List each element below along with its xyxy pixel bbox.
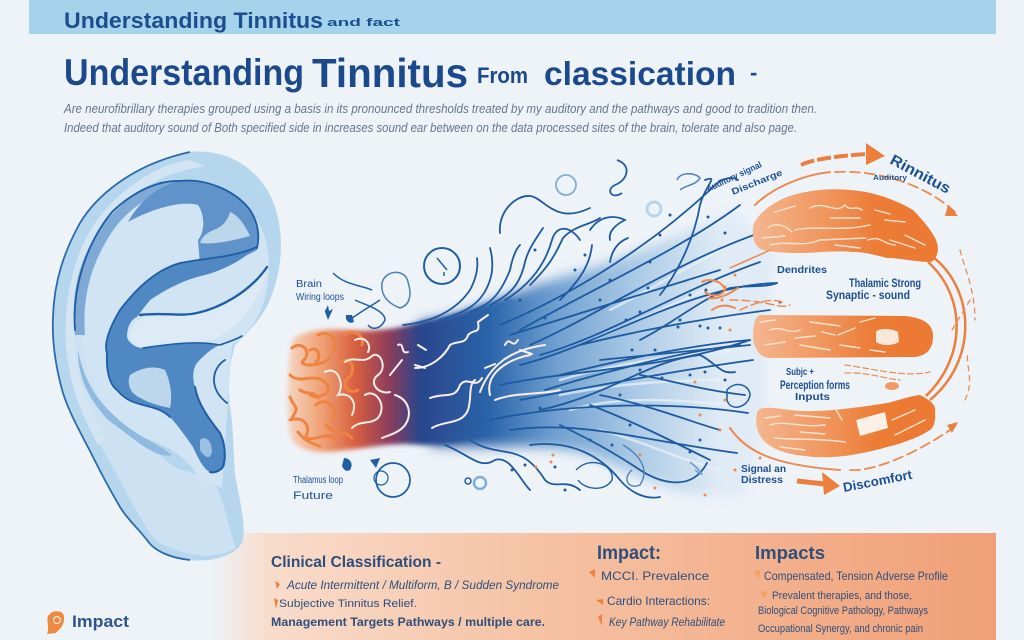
arrows below blob xyxy=(342,458,380,471)
header band xyxy=(29,0,996,34)
brain diagram labels: Inputs xyxy=(795,392,831,403)
title: classication xyxy=(544,55,736,92)
panel: impacts column: Compensated, Tension Adverse Profile xyxy=(764,569,948,583)
concha light patch xyxy=(129,368,171,408)
brain diagram labels: Discharge xyxy=(730,167,784,197)
bottom information band xyxy=(212,533,996,640)
neural strands xyxy=(403,178,797,498)
label: upper left of blob: Wiring loops xyxy=(296,292,344,303)
top orange arrow xyxy=(801,143,885,165)
panel: impacts column: Prevalent therapies, and those, xyxy=(772,590,912,602)
orange lobe: middle xyxy=(753,315,933,358)
brain diagram labels: Dendrites xyxy=(777,265,827,276)
panel: clinical classification xyxy=(271,554,559,629)
antihelix light area xyxy=(82,183,269,488)
brain diagram labels: Subjc + xyxy=(786,367,814,378)
title xyxy=(64,50,757,96)
brain diagram labels: Auditory signal xyxy=(705,159,763,194)
ear silhouette xyxy=(53,152,281,561)
impact heading: Impact: xyxy=(597,543,661,564)
title: - xyxy=(750,60,757,85)
intro paragraph xyxy=(63,102,817,135)
panel: impacts column: Occupational Synergy, and chronic pain xyxy=(758,623,923,635)
label: lower left of blob xyxy=(293,475,343,502)
brain diagram labels: Perception forms xyxy=(780,380,850,392)
panel: impact column: Key Pathway Rehabilitate xyxy=(609,615,725,629)
brain diagram labels: Thalamic Strong xyxy=(849,276,921,290)
central brain blob xyxy=(287,298,550,452)
brain diagram labels: Synaptic - sound xyxy=(826,288,910,302)
label: lower left of blob: Thalamus loop xyxy=(293,475,343,486)
brain diagram labels: Discomfort xyxy=(842,467,914,495)
arrows above blob xyxy=(324,305,354,323)
ear illustration xyxy=(53,152,281,561)
upper concha crescent xyxy=(128,181,259,265)
title: Tinnitus xyxy=(312,50,468,96)
anti-tragus shade strokes xyxy=(78,350,172,456)
header band title: Understanding Tinnitus xyxy=(64,8,323,33)
orange dashed arcs xyxy=(730,172,975,470)
label: upper left of blob: Brain xyxy=(296,279,322,290)
ear outline xyxy=(53,152,190,560)
circular doodles xyxy=(333,160,750,497)
small orange arrowheads xyxy=(945,205,958,433)
pale streaks in the fan xyxy=(560,245,740,470)
impact label: Impact xyxy=(72,612,129,631)
small orange blob xyxy=(885,382,899,390)
panel: impact column: MCCI. Prevalence xyxy=(601,569,709,583)
bottom orange arrow xyxy=(797,472,840,495)
title: From xyxy=(477,63,528,88)
panel: impact column: Cardio Interactions: xyxy=(607,594,710,608)
panel: clinical classification: Subjective Tinnitus Relief. xyxy=(279,598,417,610)
panel: impact column xyxy=(589,543,725,629)
label: upper left of blob xyxy=(296,279,344,303)
brain diagram labels: Signal an xyxy=(741,464,786,475)
orange lobe: bottom xyxy=(756,395,935,457)
header band: and fact xyxy=(327,17,401,29)
scattered dots xyxy=(458,215,780,490)
orange lobe: top xyxy=(753,189,938,262)
orange squiggles xyxy=(290,332,362,446)
impact logo xyxy=(47,611,129,634)
intro paragraph: Are neurofibrillary therapies grouped using a basis in its pronounced thresholds treated by my auditory and the pathways and good to tradition then. xyxy=(63,102,817,116)
impacts heading: Impacts xyxy=(755,543,825,563)
ear inner lines xyxy=(75,181,267,472)
blue fan behind the neural strands xyxy=(420,210,775,497)
ear lower lobe highlight xyxy=(65,225,236,556)
orange connecting arc xyxy=(926,257,965,400)
panel: clinical classification: Acute Intermittent / Multiform, B / Sudden Syndrome xyxy=(286,578,559,592)
label: top right: Rinnitus xyxy=(887,152,953,198)
brain diagram labels: Distress xyxy=(741,475,783,486)
concha fold light xyxy=(130,266,268,348)
panel: clinical classification: Management Targets Pathways / multiple care. xyxy=(271,615,545,629)
title: Understanding xyxy=(64,52,304,93)
clinical heading: Clinical Classification - xyxy=(271,554,441,571)
panel: impacts column: Biological Cognitive Pathology, Pathways xyxy=(758,605,928,617)
panel: impacts column xyxy=(754,543,948,635)
intro paragraph: Indeed that auditory sound of Both specified side in increases sound ear between on the data processed sites of the brain, tolerate and also page. xyxy=(64,121,797,135)
small orange swirl xyxy=(702,280,738,310)
helix strip xyxy=(66,160,205,445)
brain diagram labels xyxy=(705,152,953,495)
main concha shape xyxy=(106,247,257,472)
brain diagram labels: Auditory xyxy=(873,175,907,182)
label: lower left of blob: Future xyxy=(293,490,333,502)
white squiggles in the blob xyxy=(325,315,560,438)
